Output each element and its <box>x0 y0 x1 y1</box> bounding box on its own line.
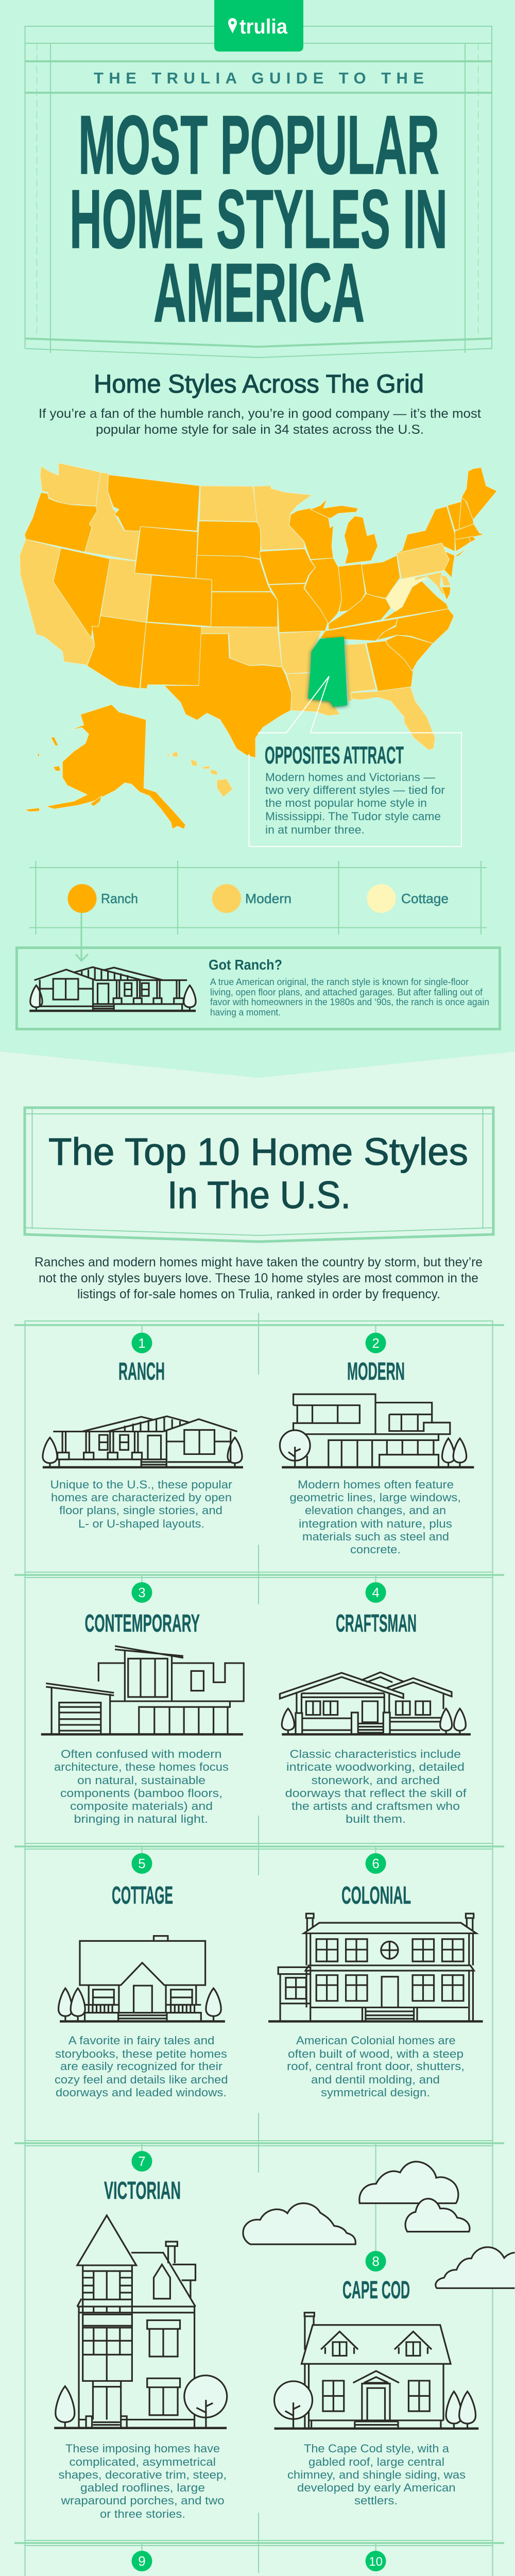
icon: ranch house <box>43 1416 243 1467</box>
description: contemporary <box>54 1748 229 1825</box>
badge 3 <box>132 1582 152 1603</box>
heading: cape cod: CAPE COD <box>342 2277 410 2304</box>
kicker: the trulia guide to the: THE TRULIA GUIDE TO THE <box>94 69 424 87</box>
badge 10: 10 <box>369 2555 383 2569</box>
description: modern: Modern homes often feature <box>298 1478 454 1491</box>
badge 10 <box>366 2551 386 2571</box>
logo: trulia <box>214 0 303 52</box>
legend: Ranch <box>101 891 138 906</box>
description: modern <box>289 1478 461 1556</box>
heading: colonial: COLONIAL <box>341 1882 411 1909</box>
callout: opposites attract: the most popular home style in <box>265 796 427 809</box>
description: cottage <box>55 2034 228 2099</box>
panel: got ranch: having a moment. <box>210 1007 281 1018</box>
heading: modern: MODERN <box>347 1358 405 1385</box>
description: cottage: are easily recognized for their <box>60 2060 222 2073</box>
heading: craftsman: CRAFTSMAN <box>336 1610 417 1637</box>
icon: victorian house <box>54 2215 227 2428</box>
description: colonial: roof, central front door, shutters, <box>287 2060 465 2073</box>
card 10: tudor <box>275 2551 475 2576</box>
heading: cottage: COTTAGE <box>112 1882 173 1909</box>
title frame <box>25 26 492 358</box>
description: modern: geometric lines, large windows, <box>289 1491 461 1504</box>
description: cape cod: settlers. <box>354 2494 398 2507</box>
description: colonial: symmetrical design. <box>321 2086 430 2099</box>
description: ranch: floor plans, single stories, and <box>59 1504 222 1517</box>
card 9: farmhouse <box>41 2551 243 2576</box>
description: contemporary: components (bamboo floors, <box>60 1787 222 1800</box>
callout: opposites attract: in at number three. <box>265 823 365 836</box>
badge 5: 5 <box>138 1856 146 1871</box>
badge 4: 4 <box>372 1585 380 1600</box>
description: cape cod <box>287 2442 466 2507</box>
logo: trulia: trulia <box>239 15 288 38</box>
description: cottage: cozy feel and details like arched <box>55 2073 228 2086</box>
main title <box>70 98 448 340</box>
card 4: craftsman <box>280 1582 471 1825</box>
card 3: contemporary <box>41 1582 244 1825</box>
intro text <box>39 406 481 437</box>
badge 7: 7 <box>138 2154 146 2169</box>
description: cottage: storybooks, these petite homes <box>55 2047 227 2060</box>
legend: Modern <box>245 891 291 906</box>
badge 5 <box>132 1853 152 1874</box>
card 8: cape cod <box>274 2251 478 2507</box>
description: contemporary: on natural, sustainable <box>77 1774 205 1787</box>
description: craftsman: built them. <box>346 1812 406 1825</box>
badge 9: 9 <box>138 2553 146 2569</box>
description: cottage: A favorite in fairy tales and <box>68 2034 214 2047</box>
badge 6 <box>366 1853 386 1874</box>
badge 6: 6 <box>372 1856 380 1871</box>
description: ranch: L- or U-shaped layouts. <box>78 1517 204 1530</box>
heading: ranch: RANCH <box>118 1358 165 1385</box>
intro text: popular home style for sale in 34 states across the U.S. <box>96 422 424 437</box>
intro: top 10: not the only styles buyers love. These 10 home styles are most common in the <box>39 1271 478 1285</box>
description: victorian: complicated, asymmetrical <box>69 2455 216 2468</box>
description: craftsman: the artists and craftsmen who <box>291 1800 460 1812</box>
icon: cape cod house <box>274 2313 478 2429</box>
heading: contemporary: CONTEMPORARY <box>84 1610 200 1637</box>
legend <box>29 861 487 935</box>
intro: top 10: listings of for-sale homes on Trulia, ranked in order by frequency. <box>77 1287 440 1301</box>
description: craftsman: intricate woodworking, detailed <box>286 1760 465 1773</box>
heading box: the top 10 home styles <box>25 1108 493 1242</box>
card 2: modern <box>280 1333 474 1556</box>
badge 2 <box>366 1333 386 1353</box>
description: cottage: doorways and leaded windows. <box>56 2086 227 2099</box>
map of the United States <box>20 463 497 829</box>
icon: ranch house small <box>29 967 196 1011</box>
badge 7 <box>132 2151 152 2172</box>
description: contemporary: Often confused with modern <box>61 1748 221 1760</box>
panel: got ranch: A true American original, the ranch style is known for single-floor <box>210 977 469 987</box>
description: cape cod: chimney, and shingle siding, was <box>287 2468 466 2481</box>
description: ranch: homes are characterized by open <box>51 1491 232 1504</box>
badge 1: 1 <box>138 1335 146 1351</box>
badge 8: 8 <box>372 2253 380 2269</box>
description: cape cod: developed by early American <box>297 2481 456 2494</box>
description: craftsman: Classic characteristics include <box>289 1748 461 1760</box>
heading: home styles across the grid: Home Styles Across The Grid <box>94 369 424 398</box>
badge 8 <box>366 2251 386 2272</box>
badge 9 <box>132 2551 152 2571</box>
description: colonial: American Colonial homes are <box>296 2034 456 2047</box>
intro text: If you’re a fan of the humble ranch, you’re in good company — it’s the most <box>39 406 481 421</box>
arrow: ranch to got ranch <box>76 913 88 961</box>
callout: opposites attract: Modern homes and Victorians — <box>265 771 435 784</box>
callout: opposites attract <box>249 676 461 846</box>
description: victorian: gabled rooflines, large <box>80 2481 205 2494</box>
description: victorian: shapes, decorative trim, steep, <box>59 2468 227 2481</box>
description: contemporary: bringing in natural light. <box>74 1812 208 1825</box>
description: ranch: Unique to the U.S., these popular <box>50 1478 232 1491</box>
description: modern: elevation changes, and an <box>305 1504 446 1517</box>
clouds <box>243 2162 514 2288</box>
callout: opposites attract: two very different styles — tied for <box>265 784 445 796</box>
intro: top 10 <box>35 1255 483 1301</box>
description: cape cod: The Cape Cod style, with a <box>304 2442 450 2455</box>
description: victorian: wraparound porches, and two <box>61 2494 225 2507</box>
section background: top 10 <box>0 1052 515 2576</box>
card 6: colonial <box>268 1853 483 2099</box>
description: colonial <box>287 2034 465 2099</box>
description: contemporary: architecture, these homes focus <box>54 1760 229 1773</box>
panel: got ranch: favor with homeowners in the 1980s and ‘90s, the ranch is once again <box>210 997 489 1007</box>
legend: Cottage <box>401 891 449 906</box>
description: modern: materials such as steel and <box>302 1530 449 1543</box>
description: modern: integration with nature, plus <box>299 1517 452 1530</box>
grid lines <box>14 1313 504 2576</box>
description: contemporary: composite materials) and <box>70 1800 213 1812</box>
description: victorian <box>59 2442 227 2520</box>
description: craftsman <box>285 1748 467 1825</box>
heading: victorian: VICTORIAN <box>104 2177 181 2205</box>
description: craftsman: doorways that reflect the skill of <box>285 1787 467 1800</box>
description: cape cod: gabled roof, large central <box>308 2455 444 2468</box>
description: colonial: and dentil molding, and <box>311 2073 440 2086</box>
description: colonial: often built of wood, with a steep <box>288 2047 464 2060</box>
heading box: the top 10 home styles: In The U.S. <box>167 1174 351 1216</box>
card 1: ranch <box>43 1333 243 1530</box>
description: craftsman: stonework, and arched <box>312 1774 440 1787</box>
callout: opposites attract: Mississippi. The Tudor style came <box>265 810 441 823</box>
description: victorian: These imposing homes have <box>65 2442 220 2455</box>
panel: got ranch: living, open floor plans, and attached garages. But after falling out of <box>210 987 483 997</box>
icon: cottage house <box>59 1936 225 2021</box>
badge 4 <box>366 1582 386 1603</box>
icon: colonial house <box>268 1913 483 2021</box>
description: ranch <box>50 1478 232 1530</box>
card 7: victorian <box>54 2151 227 2520</box>
description: modern: concrete. <box>350 1543 401 1556</box>
heading box: the top 10 home styles: The Top 10 Home Styles <box>48 1130 468 1173</box>
panel: got ranch: Got Ranch? <box>209 957 282 973</box>
intro: top 10: Ranches and modern homes might have taken the country by storm, but they’re <box>35 1255 483 1269</box>
icon: modern house <box>280 1394 474 1467</box>
badge 3: 3 <box>138 1585 146 1600</box>
icon: contemporary house <box>41 1646 244 1734</box>
icon: craftsman house <box>280 1672 471 1734</box>
badge 2: 2 <box>372 1335 380 1351</box>
card 5: cottage <box>55 1853 228 2099</box>
badge 1 <box>132 1333 152 1353</box>
panel: got ranch <box>16 948 500 1029</box>
description: victorian: or three stories. <box>100 2507 185 2520</box>
